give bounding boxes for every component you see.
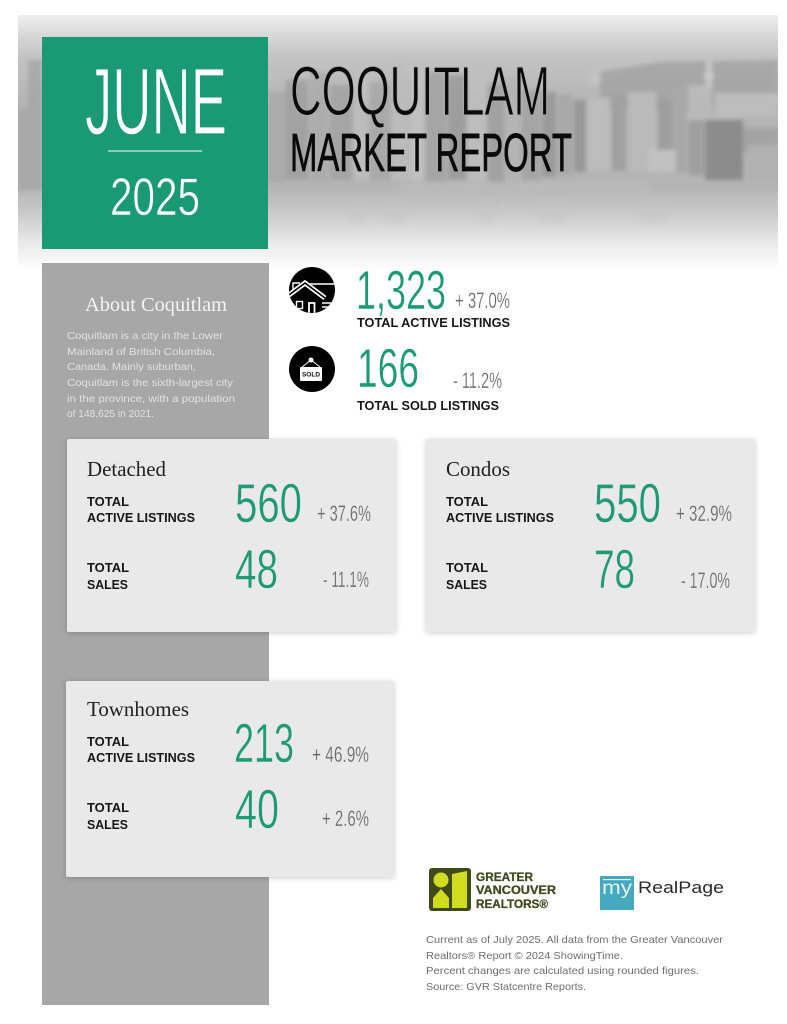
logo: myrealpage [600, 876, 724, 910]
title: MARKET REPORT [290, 123, 572, 183]
about panel: Mainland of British Columbia, [67, 346, 215, 358]
logo: greater vancouver realtors: GREATER [476, 870, 533, 884]
about panel: Coquitlam is a city in the Lower [67, 330, 224, 342]
panel: condos: + 32.9% [676, 501, 732, 526]
about panel: of 148,625 in 2021. [67, 408, 154, 420]
logo: myrealpage: RealPage [638, 878, 724, 897]
stat: sold listings: - 11.2% [453, 368, 502, 393]
panel: townhomes: TOTAL [87, 734, 129, 749]
panel: detached: TOTAL [87, 494, 129, 509]
panel: detached: Detached [87, 457, 166, 481]
about panel [67, 294, 235, 420]
panel: detached: + 37.6% [317, 501, 371, 526]
distant hill [600, 59, 778, 100]
source note: Current as of July 2025. All data from the Greater Vancouver [426, 934, 724, 946]
about panel: in the province, with a population [67, 393, 235, 405]
logo: greater vancouver realtors: REALTORS® [476, 897, 548, 911]
panel: condos: SALES [446, 577, 487, 592]
stat: active listings: TOTAL ACTIVE LISTINGS [357, 315, 510, 330]
panel: condos: - 17.0% [681, 568, 730, 593]
about panel: About Coquitlam [85, 294, 227, 316]
panel: townhomes: Townhomes [87, 697, 189, 721]
icon: sold sign [289, 346, 335, 392]
panel: townhomes: + 2.6% [322, 806, 369, 831]
panel: condos: TOTAL [446, 560, 488, 575]
year: 2025 [110, 168, 200, 227]
stat: active listings: + 37.0% [455, 288, 510, 313]
month: JUNE [85, 49, 227, 155]
stat: active listings: 1,323 [356, 259, 446, 321]
panel: condos: 550 [594, 472, 661, 534]
panel: townhomes: ACTIVE LISTINGS [87, 750, 195, 765]
panel: detached: ACTIVE LISTINGS [87, 510, 195, 525]
panel: condos [426, 439, 755, 632]
about panel: Coquitlam is the sixth-largest city [67, 377, 234, 389]
panel: townhomes: SALES [87, 817, 128, 832]
icon: sold sign: SOLD [302, 372, 320, 378]
logo: greater vancouver realtors [429, 868, 556, 911]
panel: townhomes: TOTAL [87, 800, 129, 815]
source note: Source: GVR Statcentre Reports. [426, 981, 586, 993]
panel: detached: 560 [235, 472, 302, 534]
stat: sold listings: TOTAL SOLD LISTINGS [357, 398, 499, 413]
panel: condos: 78 [594, 538, 635, 600]
panel: detached: TOTAL [87, 560, 129, 575]
about panel: Canada. Mainly suburban, [67, 361, 196, 373]
title: COQUITLAM [290, 52, 550, 130]
title [290, 52, 572, 183]
panel: townhomes: + 46.9% [312, 742, 369, 767]
icon: house [289, 267, 336, 315]
water reflections [350, 198, 666, 224]
panel: detached: SALES [87, 577, 128, 592]
shoreline [488, 181, 504, 186]
panel: townhomes [66, 681, 394, 877]
panel: detached: 48 [235, 538, 278, 600]
logo: greater vancouver realtors: VANCOUVER [476, 883, 556, 897]
panel: condos: TOTAL [446, 494, 488, 509]
sidebar panel [42, 263, 269, 1005]
stat: sold listings [357, 337, 502, 413]
panel: condos: ACTIVE LISTINGS [446, 510, 554, 525]
panel: detached: - 11.1% [323, 567, 369, 592]
panel: townhomes: 213 [234, 712, 294, 774]
date block [42, 37, 268, 249]
source note [426, 934, 724, 993]
logo: myrealpage: my [602, 878, 633, 899]
source note: Percent changes are calculated using rounded figures. [426, 965, 699, 977]
panel: townhomes: 40 [235, 778, 279, 840]
stat: sold listings: 166 [357, 337, 419, 399]
panel: detached [67, 439, 396, 632]
source note: Realtors® Report © 2024 ShowingTime. [426, 950, 623, 962]
panel: condos: Condos [446, 457, 510, 481]
header photo banner [18, 15, 778, 268]
